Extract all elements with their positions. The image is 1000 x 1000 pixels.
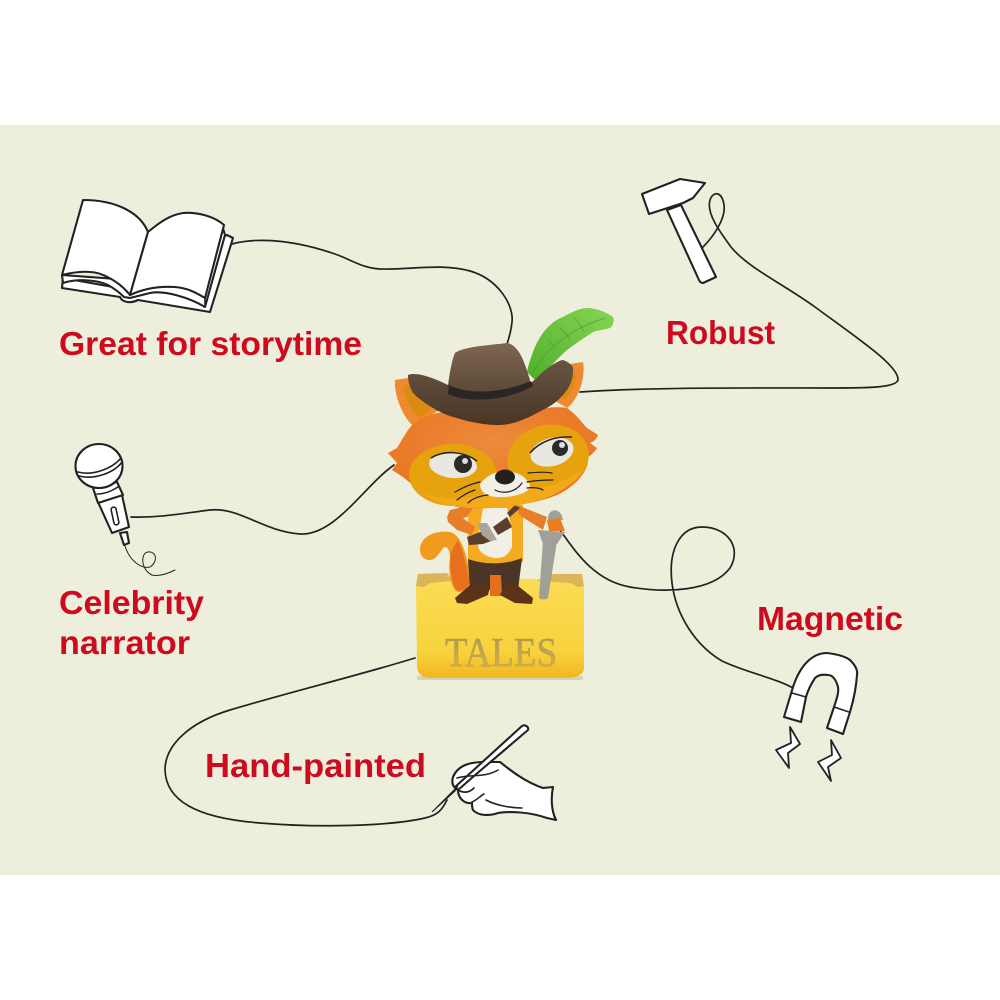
connector: microphone to figure xyxy=(131,465,394,534)
lower face xyxy=(422,470,582,508)
left eye xyxy=(428,450,478,480)
background panel xyxy=(0,125,1000,875)
muzzle xyxy=(480,472,530,497)
head xyxy=(388,407,598,508)
icon: magnet with sparks xyxy=(776,653,857,781)
hat band xyxy=(448,381,533,400)
right eye xyxy=(527,433,577,471)
arms and strap xyxy=(447,505,547,545)
label: Celebrity narrator: Celebrity xyxy=(59,584,205,621)
label: Great for storytime: Great for storytime xyxy=(59,325,362,362)
connector: hand-painted to figure xyxy=(165,658,447,826)
icon: hammer xyxy=(642,179,716,283)
label: Celebrity narrator xyxy=(59,584,205,661)
body xyxy=(468,505,523,566)
figure: Puss in Boots on Tales base xyxy=(388,308,614,680)
feather xyxy=(527,308,614,382)
connector: magnet to figure xyxy=(556,525,793,688)
ears xyxy=(395,362,584,425)
nose and whiskers xyxy=(455,470,553,503)
eye patches xyxy=(409,444,497,506)
icon: open book xyxy=(62,200,233,312)
figure base xyxy=(416,573,584,680)
tail xyxy=(420,532,473,592)
label: Magnetic: Magnetic xyxy=(757,600,903,637)
label: Hand-painted: Hand-painted xyxy=(205,747,426,784)
icon: microphone xyxy=(76,444,175,576)
base lettering: TALES xyxy=(445,629,557,675)
trousers and boots xyxy=(455,558,533,604)
icon: hand holding brush xyxy=(432,725,556,820)
connector: hammer to figure xyxy=(580,194,898,392)
sword xyxy=(538,510,565,600)
label: Celebrity narrator: narrator xyxy=(59,624,190,661)
connector: book to figure xyxy=(232,240,512,344)
hat xyxy=(408,343,573,425)
label: Robust: Robust xyxy=(666,314,775,351)
